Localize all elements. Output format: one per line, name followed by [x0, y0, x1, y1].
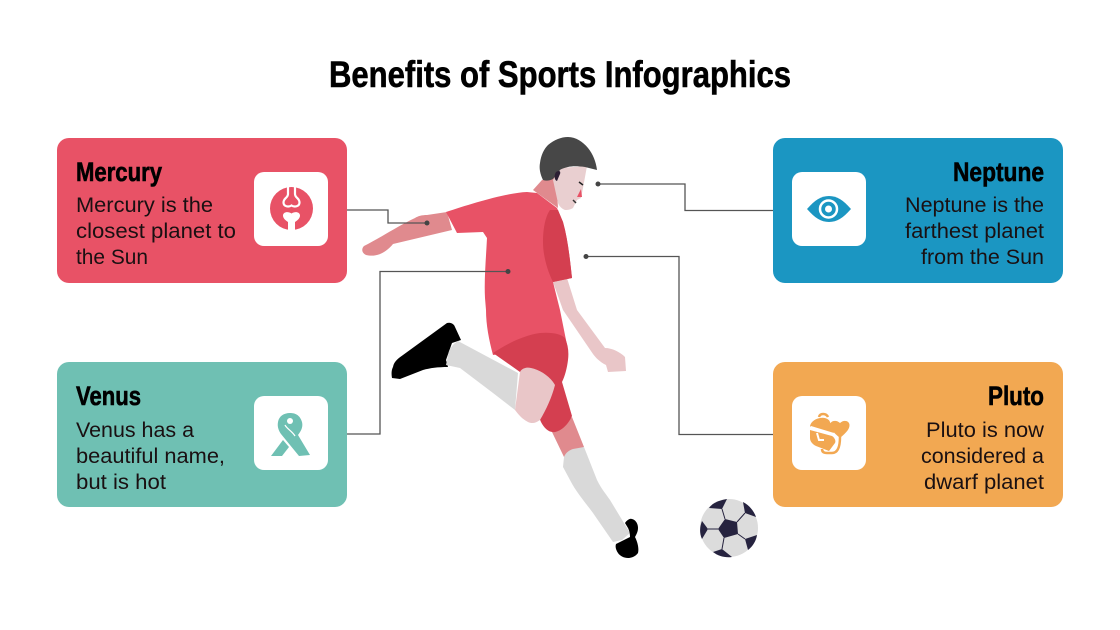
icon: eye — [792, 172, 866, 246]
sleeve shadow — [543, 210, 572, 282]
shirt — [446, 192, 572, 355]
text: Mercury description: Mercury is the — [76, 194, 213, 217]
panel: Neptune — [773, 138, 1063, 283]
left arm — [362, 212, 452, 256]
title: Benefits of Sports Infographics — [329, 54, 791, 95]
text: Venus description: Venus has a — [76, 419, 194, 442]
panel: Pluto — [773, 362, 1063, 507]
text: Neptune description: Neptune is the — [905, 194, 1044, 217]
hair — [540, 137, 597, 181]
text: Mercury description: closest planet to — [76, 220, 236, 243]
connector: Neptune to head — [596, 182, 773, 210]
text: Neptune description — [905, 194, 1044, 269]
kicking leg sock — [446, 341, 518, 410]
figure: football player — [362, 137, 638, 558]
heading: Pluto: Pluto — [988, 381, 1044, 411]
heading: Venus: Venus — [76, 381, 141, 411]
right arm — [553, 278, 626, 372]
face — [553, 166, 587, 210]
right shoe — [616, 519, 638, 558]
text: Venus description — [76, 419, 225, 494]
lower leg skin — [552, 417, 584, 457]
panel: Mercury — [57, 138, 347, 283]
connector: Pluto to shoulder — [584, 254, 773, 434]
mouth — [573, 200, 576, 203]
text: Mercury description — [76, 194, 236, 269]
shorts — [493, 333, 572, 432]
text: Neptune description: farthest planet — [905, 220, 1044, 243]
knee — [515, 368, 555, 423]
text: Venus description: but is hot — [76, 471, 166, 494]
connector: Venus to torso — [347, 269, 510, 434]
text: Pluto description: Pluto is now — [926, 419, 1045, 442]
icon: medical bag with heart — [792, 396, 866, 470]
ear — [555, 171, 560, 181]
left shoe — [392, 323, 461, 379]
icon: bone joint — [254, 172, 328, 246]
eye — [579, 182, 583, 185]
nose — [577, 189, 582, 197]
text: Mercury description: the Sun — [76, 246, 148, 269]
heading: Mercury: Mercury — [76, 157, 162, 187]
text: Neptune description: from the Sun — [921, 246, 1044, 269]
connector: Mercury to arm — [347, 210, 430, 226]
text: Pluto description — [921, 419, 1045, 494]
text: Venus description: beautiful name, — [76, 445, 225, 468]
standing leg sock — [563, 447, 630, 542]
icon: soccer ball — [700, 499, 758, 557]
text: Pluto description: considered a — [921, 445, 1044, 468]
panel: Venus — [57, 362, 347, 507]
text: Pluto description: dwarf planet — [924, 471, 1044, 494]
neck — [533, 176, 558, 208]
icon: ribbon — [254, 396, 328, 470]
heading: Neptune: Neptune — [953, 157, 1044, 187]
